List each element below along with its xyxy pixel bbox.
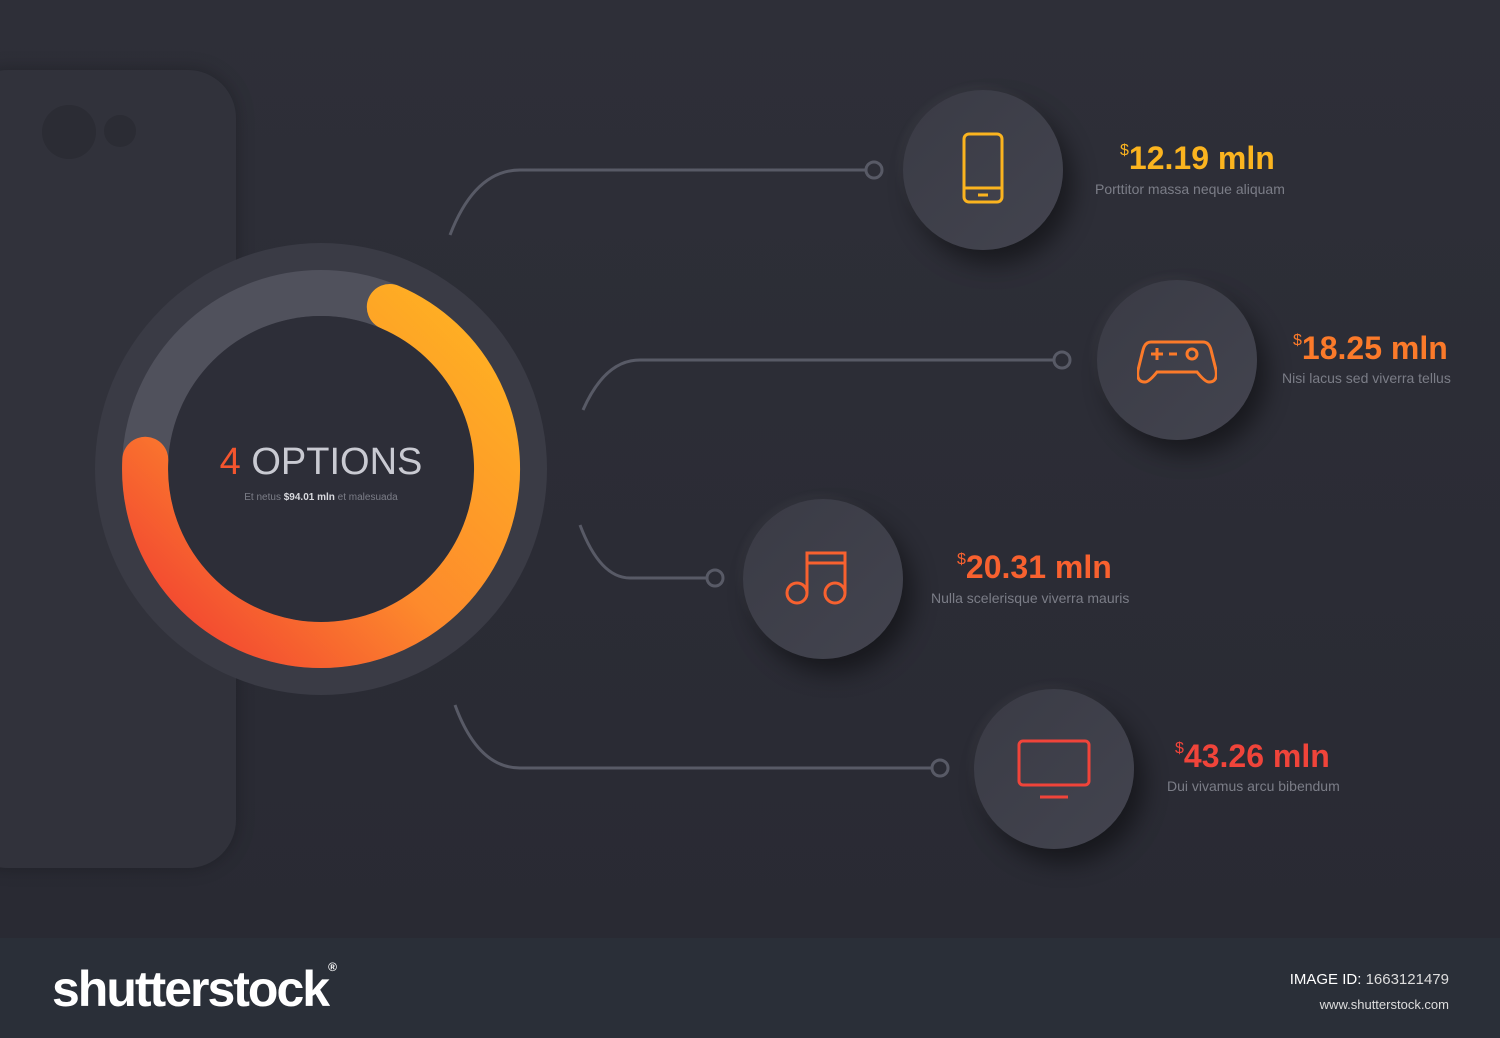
value: 43.26: $43.26 mln <box>1175 738 1330 774</box>
footer <box>0 938 1500 1038</box>
node: monitor <box>974 689 1134 849</box>
donut chart: Et netus $94.01 mln et malesuada <box>244 492 398 503</box>
footer image id: www.shutterstock.com <box>1320 997 1449 1012</box>
node: phone <box>903 90 1063 250</box>
footer logo: shutterstock® <box>52 960 335 1017</box>
value: 12.19: $12.19 mln <box>1120 140 1275 176</box>
value: 20.31: $20.31 mln <box>957 549 1112 585</box>
text: Dui vivamus arcu bibendum <box>1167 778 1340 794</box>
footer image id <box>1290 971 1449 1012</box>
node: music <box>743 499 903 659</box>
footer image id: IMAGE ID: 1663121479 <box>1290 971 1449 988</box>
donut chart <box>95 243 547 695</box>
phone card background <box>0 70 236 868</box>
donut center text: 4 OPTIONS <box>220 441 422 483</box>
text: Nisi lacus sed viverra tellus <box>1282 370 1451 386</box>
text: Nulla scelerisque viverra mauris <box>931 590 1129 606</box>
text: Porttitor massa neque aliquam <box>1095 181 1285 197</box>
node: gamepad <box>1097 280 1257 440</box>
value: 18.25: $18.25 mln <box>1293 330 1448 366</box>
